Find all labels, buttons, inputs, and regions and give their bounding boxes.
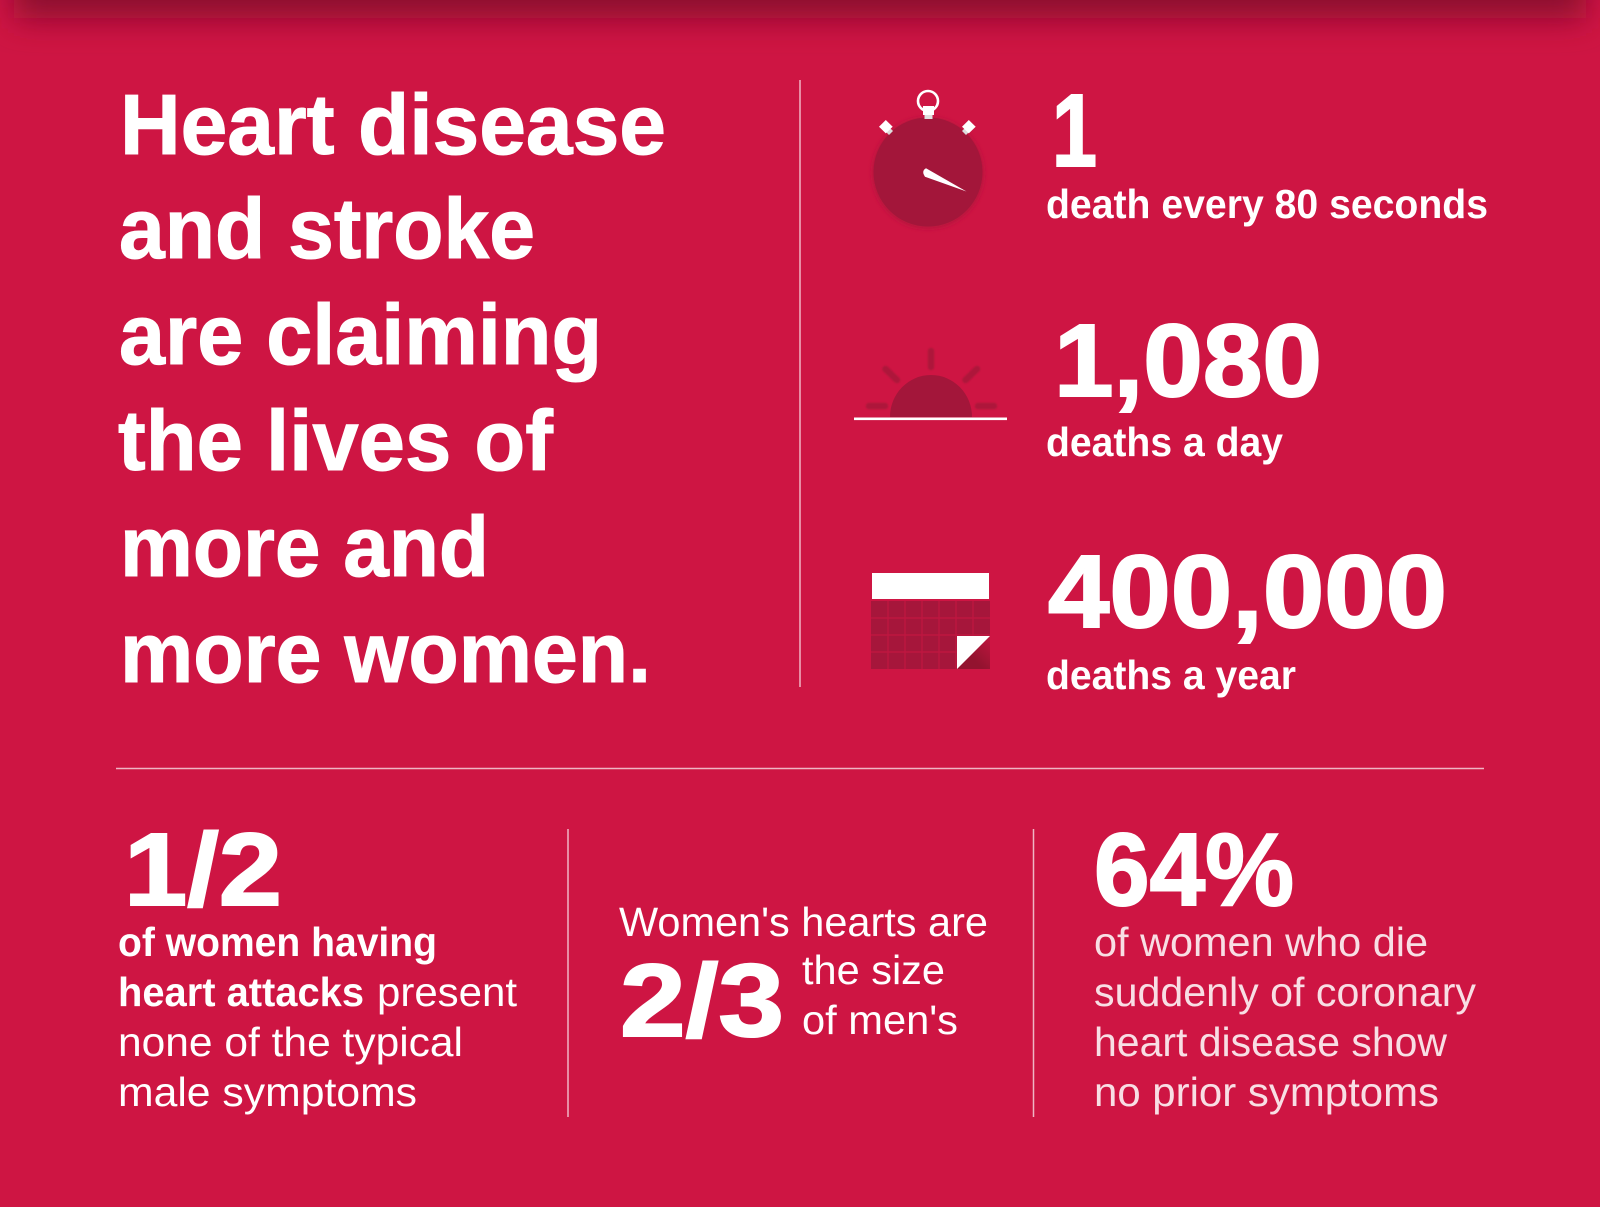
stat: 64% no prior symptoms: suddenly of coronary <box>1094 969 1476 1015</box>
stat: 2/3 size of hearts: Women's hearts are <box>619 899 988 945</box>
heading: the lives of <box>118 394 554 489</box>
icon: calendar <box>871 573 990 669</box>
icon: sun <box>854 351 1007 420</box>
stat: 1,080 deaths a day: deaths a day <box>1046 419 1283 465</box>
stat: 400,000 deaths a year: deaths a year <box>1046 652 1296 698</box>
stat: 1/2 of women: heart attacks <box>118 969 364 1015</box>
heading: and stroke <box>119 182 535 277</box>
stat: 64% no prior symptoms: heart disease show <box>1094 1019 1447 1065</box>
stat: 400,000 deaths a year: 400,000 <box>1048 534 1447 649</box>
stat: 400,000 deaths a year <box>1046 534 1447 698</box>
stat: 64% no prior symptoms: of women who die <box>1094 919 1428 965</box>
stat: 64% no prior symptoms <box>1094 812 1476 1115</box>
top shadow band <box>14 0 1586 18</box>
stat: 2/3 size of hearts: of men's <box>802 997 958 1043</box>
stat: 1,080 deaths a day <box>1046 303 1322 465</box>
stat: 64% no prior symptoms: no prior symptoms <box>1094 1069 1439 1115</box>
heading <box>118 78 666 701</box>
stat: 2/3 size of hearts: 2/3 <box>620 943 784 1058</box>
stat: 1/2 of women <box>118 812 518 1115</box>
stat: 1 death every 80 seconds: death every 80 seconds <box>1046 181 1488 227</box>
stat: 2/3 size of hearts: the size <box>802 947 945 993</box>
stat: 1 death every 80 seconds <box>1046 73 1488 227</box>
stat: 1/2 of women: none of the typical <box>118 1019 463 1065</box>
heading: more and <box>120 500 489 595</box>
stat: 1/2 of women: present <box>377 969 518 1015</box>
stat: 1/2 of women: male symptoms <box>118 1069 417 1115</box>
stat: 64% no prior symptoms: 64% <box>1094 812 1294 927</box>
stat: 1 death every 80 seconds: 1 <box>1052 73 1097 188</box>
heading: more women. <box>120 606 651 701</box>
icon: stopwatch <box>872 91 984 229</box>
stat: 1,080 deaths a day: 1,080 <box>1054 303 1322 418</box>
stat: 1/2 of women: of women having <box>118 919 437 965</box>
heading: Heart disease <box>120 78 666 173</box>
heading: are claiming <box>119 288 602 383</box>
stat: 1/2 of women: 1/2 <box>124 812 282 927</box>
stat: 2/3 size of hearts <box>619 899 988 1058</box>
